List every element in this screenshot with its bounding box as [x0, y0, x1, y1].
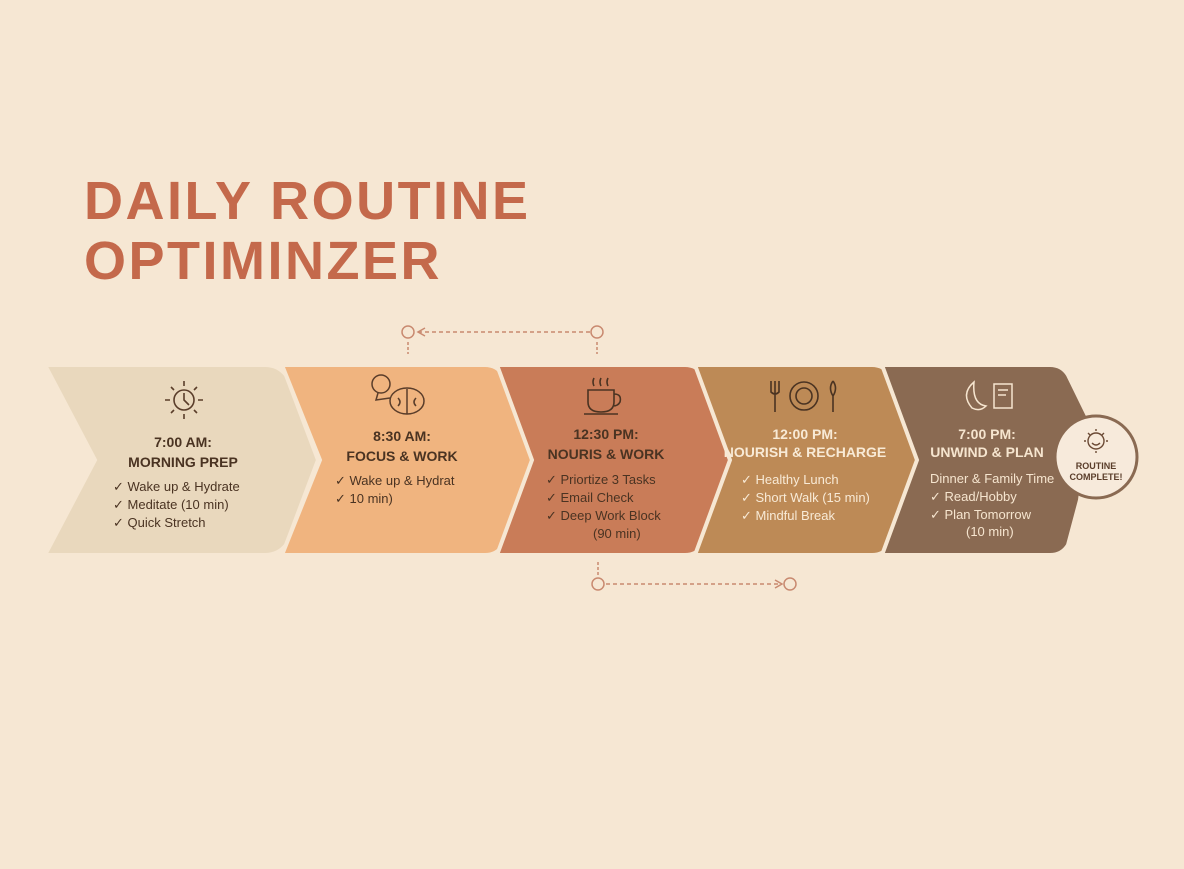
callout: routine complete: ROUTINE [1076, 461, 1116, 471]
panel: nouris & work: ✓ Priortize 3 Tasks [546, 472, 656, 487]
icon: sun clock [165, 381, 203, 419]
panel: nouris & work: NOURIS & WORK [548, 446, 664, 462]
icon: coffee cup [584, 378, 620, 414]
callout: routine complete [1055, 416, 1137, 498]
panel: nouris & work: ✓ Deep Work Block [546, 508, 661, 523]
panel: nourish & recharge [695, 365, 920, 555]
icon: brain [372, 375, 424, 414]
icon: plate and cutlery [771, 381, 836, 412]
panel: unwind & plan: Dinner & Family Time [930, 471, 1054, 486]
title: DAILY ROUTINE [84, 171, 531, 231]
panel: focus & work: 8:30 AM: [373, 428, 431, 444]
panel: unwind & plan: 7:00 PM: [958, 426, 1016, 442]
arrow: bottom dashed connector [592, 562, 796, 590]
icon: moon and book [966, 382, 1012, 410]
panel: morning prep [45, 365, 318, 555]
title: OPTIMINZER [84, 231, 442, 291]
panel: unwind & plan: ✓ Plan Tomorrow [930, 507, 1032, 522]
panel: focus & work [282, 365, 533, 555]
panel: nourish & recharge: 12:00 PM: [772, 426, 838, 442]
panel: focus & work: FOCUS & WORK [346, 448, 458, 464]
panel: unwind & plan: ✓ Read/Hobby [930, 489, 1017, 504]
panel: morning prep: ✓ Meditate (10 min) [113, 497, 229, 512]
panel: nourish & recharge: NOURISH & RECHARGE [724, 444, 886, 460]
text: MORNING PREP [128, 454, 238, 470]
panel: focus & work: ✓ 10 min) [335, 491, 393, 506]
panel: morning prep: ✓ Quick Stretch [113, 515, 206, 530]
panel: unwind & plan: UNWIND & PLAN [930, 444, 1044, 460]
panel: nouris & work: (90 min) [593, 526, 641, 541]
panel: nouris & work [497, 365, 735, 555]
panel: nourish & recharge: ✓ Short Walk (15 min) [741, 490, 870, 505]
panel: unwind & plan [882, 365, 1090, 555]
panel: nourish & recharge: ✓ Mindful Break [741, 508, 835, 523]
panel: unwind & plan: (10 min) [966, 524, 1014, 539]
title [84, 171, 531, 291]
panel: focus & work: ✓ Wake up & Hydrat [335, 473, 455, 488]
arrow: top dashed connector [402, 326, 603, 354]
panel: nouris & work: ✓ Email Check [546, 490, 634, 505]
callout: routine complete: COMPLETE! [1070, 472, 1123, 482]
text [128, 434, 238, 470]
panel: morning prep: ✓ Wake up & Hydrate [113, 479, 240, 494]
panel: nourish & recharge: ✓ Healthy Lunch [741, 472, 839, 487]
text: 7:00 AM: [154, 434, 212, 450]
panel: nouris & work: 12:30 PM: [573, 426, 639, 442]
